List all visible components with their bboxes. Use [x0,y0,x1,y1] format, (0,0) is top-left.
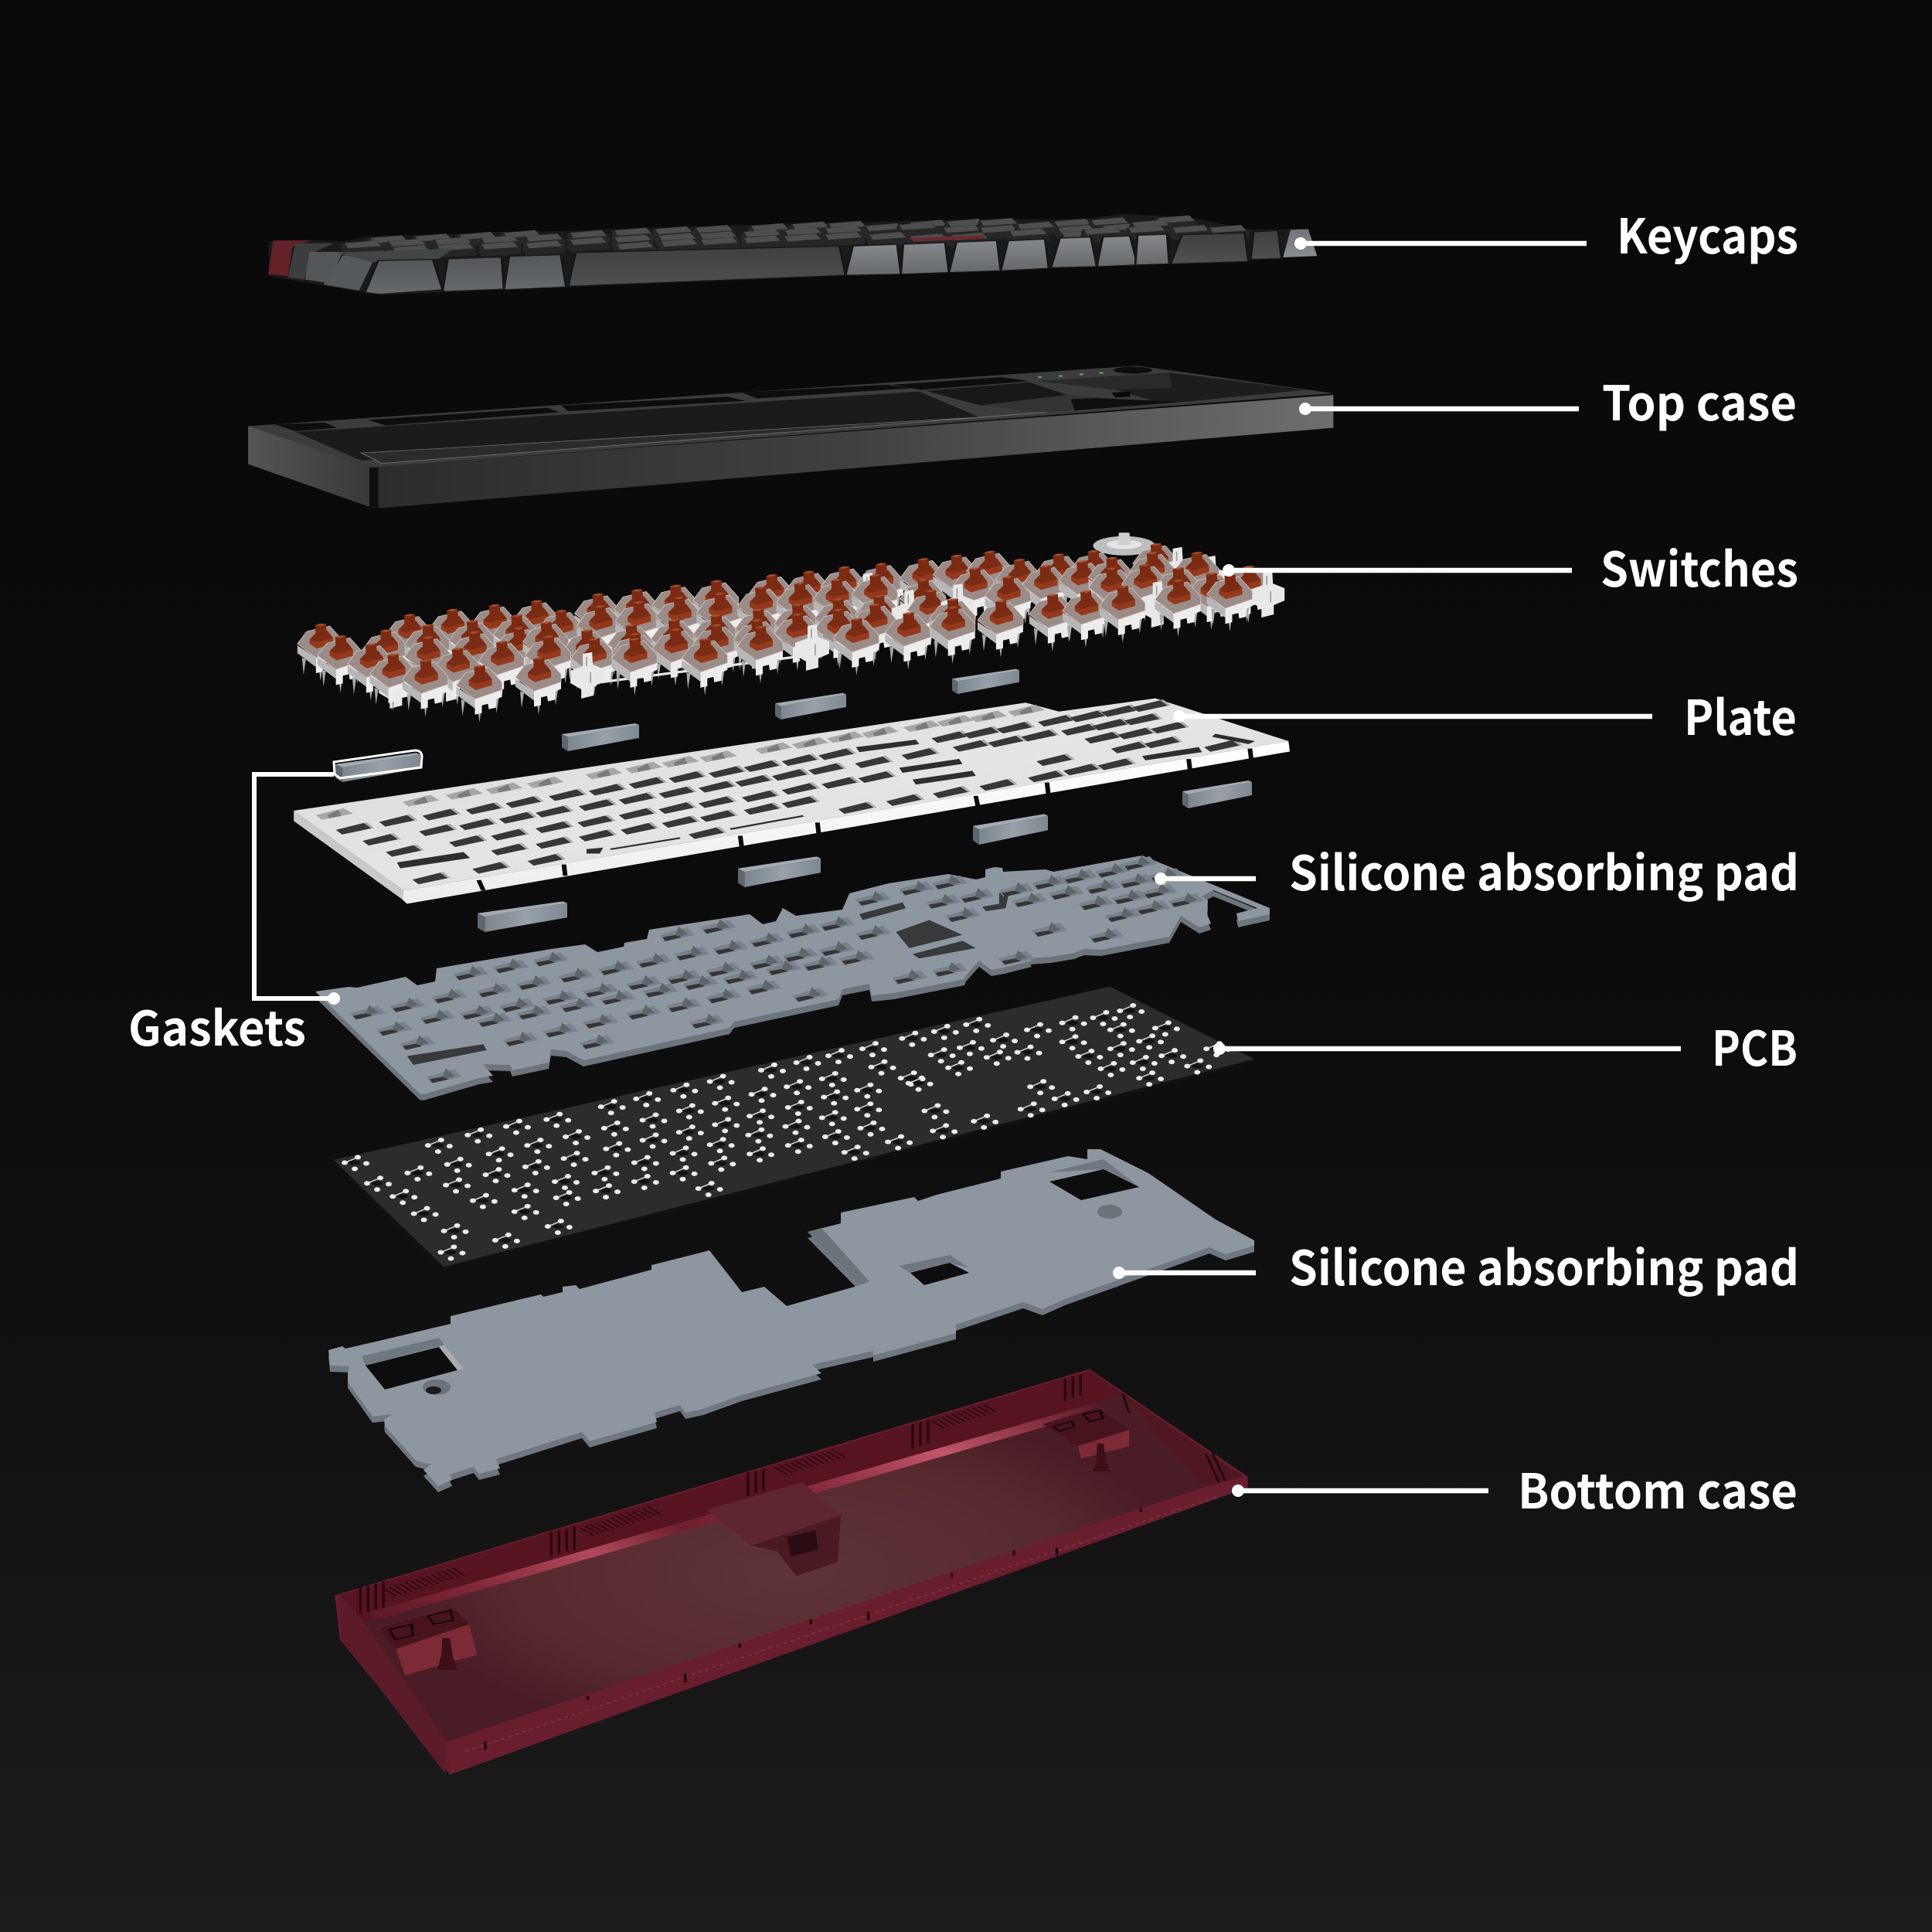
right mount box [1043,1407,1129,1471]
back slots [274,377,1029,431]
layer: switches [298,532,1284,723]
pad1 switch openings [350,855,1204,1083]
callout: switches [1223,531,1798,600]
stabilizer wire [594,656,801,683]
pad2 notch wall [808,1228,869,1285]
lip ticks [485,1509,1141,1750]
plate function-row cutouts [316,705,1045,820]
callout: bottom case: Bottom case [1518,1453,1798,1522]
center stand [706,1482,841,1576]
layer: top case [248,366,1333,508]
callout: gaskets [128,774,340,1060]
left mount box [379,1607,477,1675]
red escape key [268,240,311,276]
callout: lower silicone pad: Silicone absorbing pad [1289,1230,1799,1299]
case top rim [248,366,1333,468]
case left side [248,426,372,508]
pad2 thickness [328,1155,1254,1492]
pad1 center cutouts [406,892,1009,1065]
ribs [360,1375,1226,1613]
bottom case back wall [340,1371,1123,1621]
callout: keycaps [1294,198,1798,267]
layer: lower silicone absorbing pad [328,1149,1254,1492]
pad2 top surface [328,1149,1254,1486]
layer: PCB [334,987,1254,1270]
callout: PCB [1213,1010,1798,1080]
tray well [295,392,980,461]
plate front lip [402,741,1290,904]
pad2 square cutouts [362,1159,1139,1366]
callout: top case [1299,365,1797,434]
case front side [372,395,1333,508]
bottom case right wall [1090,1371,1243,1488]
layer: plate [294,699,1290,904]
callout: PCB: PCB [1712,1010,1798,1080]
plate switch cutouts [336,699,1243,884]
bottom case left wall [340,1597,447,1774]
callout: switches: Switches [1600,531,1798,600]
layer: keycaps [268,214,1317,295]
pad1 top surface [315,855,1270,1094]
bottom case floor [363,1394,1203,1742]
bottom case front lip [447,1477,1246,1774]
callout: top case: Top case [1602,365,1797,434]
front row keys [365,230,1281,294]
right compartments [926,383,1067,406]
callout: upper silicone pad: Silicone absorbing pad [1289,835,1799,904]
callout: plate: Plate [1684,679,1797,749]
pad1 thickness [315,862,1270,1100]
tray floor [361,412,1046,464]
pad2 round holes [423,1205,1122,1395]
PCB solder pads [342,1003,1231,1261]
callout: keycaps: Keycaps [1617,198,1798,267]
callout: gaskets: Gaskets [128,990,306,1060]
plate top surface [294,699,1288,890]
layer: upper silicone absorbing pad [315,855,1270,1100]
highlighted gasket [334,750,422,782]
gaskets [334,669,1252,932]
callout: plate [1173,679,1797,749]
rear bar highlight [373,1406,1100,1616]
knob encoder [1093,532,1155,556]
layer: bottom case [335,1369,1248,1774]
plate stabilizer cutouts [397,733,1255,869]
left side keys [288,243,454,291]
callout: bottom case [1232,1453,1798,1522]
